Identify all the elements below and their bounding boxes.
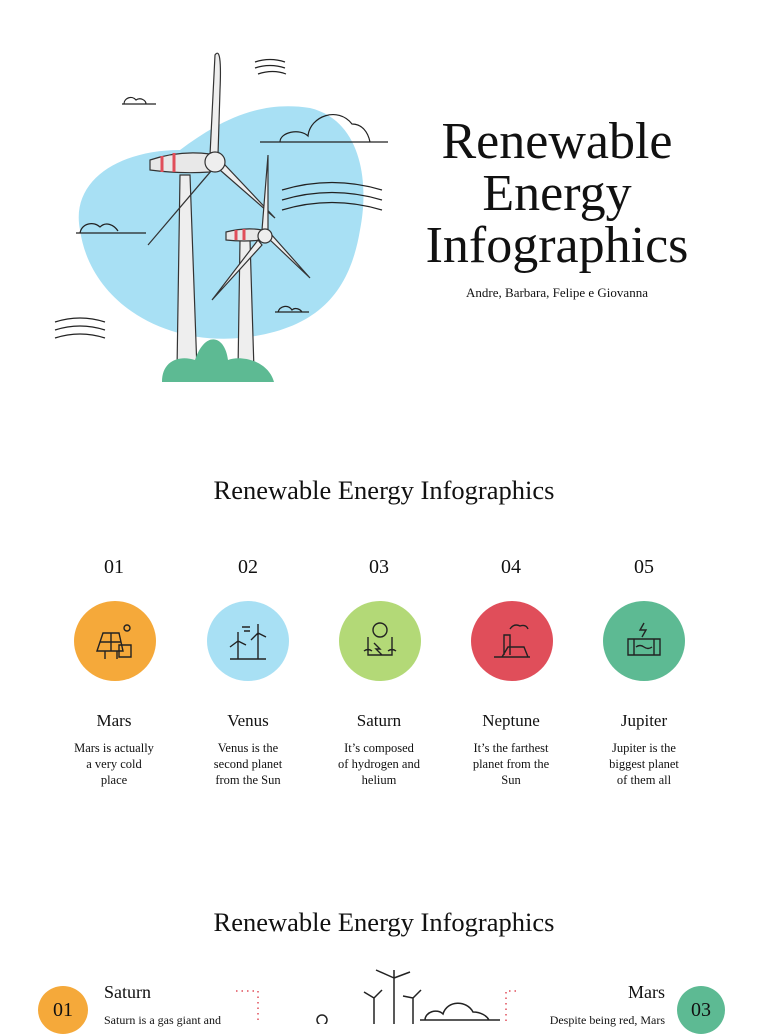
step 05 (603, 556, 685, 787)
illustration: wind turbines (54, 52, 388, 382)
section heading 2: Renewable Energy Infographics (214, 907, 554, 937)
step 02: second planet (214, 757, 282, 771)
step 01: 01 (104, 556, 124, 578)
dotted connectors (236, 990, 516, 1021)
step 04: Sun (501, 773, 521, 787)
step 01: a very cold (86, 757, 142, 771)
blob (79, 106, 363, 339)
step 05: of them all (617, 773, 671, 787)
step 04: It’s the farthest (474, 741, 548, 755)
title: Renewable Energy Infographics (426, 113, 688, 274)
step 01: Mars is actually (74, 741, 154, 755)
step 04 (471, 556, 553, 787)
step 03: helium (362, 773, 396, 787)
step 02: Venus (227, 711, 269, 730)
item 01 left: 01 (53, 999, 73, 1021)
step 03: It’s composed (344, 741, 414, 755)
item 01 left (38, 982, 221, 1034)
step 02: from the Sun (215, 773, 281, 787)
step 02 (207, 556, 289, 787)
item 03 right: Mars (628, 982, 665, 1002)
step 03: Saturn (357, 711, 401, 730)
step 05: 05 (634, 556, 654, 578)
step 04: 04 (501, 556, 521, 578)
step 01: place (101, 773, 127, 787)
item 03 right: Despite being red, Mars (550, 1013, 665, 1027)
small turbines illustration (316, 969, 500, 1024)
step 05: Jupiter is the (612, 741, 676, 755)
step 02: Venus is the (218, 741, 278, 755)
step 05: Jupiter (621, 711, 667, 730)
item 03 right (550, 982, 725, 1034)
step 05: biggest planet (609, 757, 679, 771)
subtitle: Andre, Barbara, Felipe e Giovanna (466, 285, 648, 300)
step 03: of hydrogen and (338, 757, 420, 771)
section heading 1: Renewable Energy Infographics (214, 475, 554, 505)
step 01: Mars (97, 711, 131, 730)
step 03 (338, 556, 421, 787)
step 04: Neptune (482, 711, 540, 730)
item 03 right: 03 (691, 999, 711, 1021)
item 01 left: Saturn is a gas giant and (104, 1013, 221, 1027)
step 04: planet from the (473, 757, 549, 771)
step 03: 03 (369, 556, 389, 578)
step 01 (74, 556, 156, 787)
item 01 left: Saturn (104, 982, 151, 1002)
step 02: 02 (238, 556, 258, 578)
